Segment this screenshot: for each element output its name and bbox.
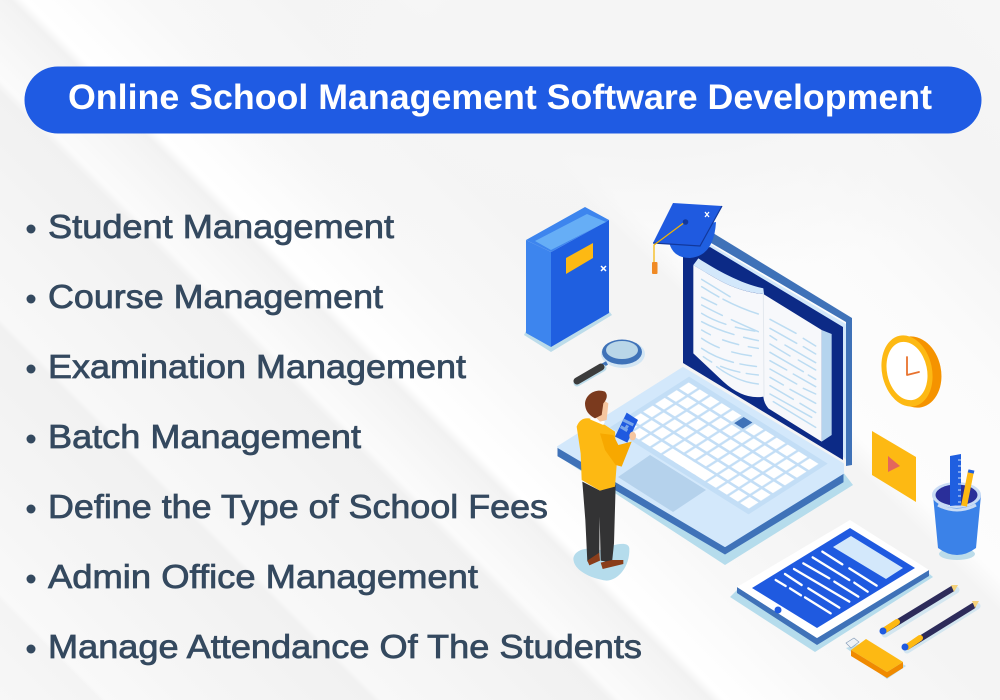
head xyxy=(593,397,608,422)
laptop screen lid xyxy=(683,233,852,466)
icon: graduation cap xyxy=(652,203,722,274)
book text lines xyxy=(702,279,816,427)
icon: pen 2 xyxy=(902,601,979,650)
laptop xyxy=(558,233,853,565)
feature list xyxy=(26,208,642,665)
title banner xyxy=(24,66,982,134)
person with tablet xyxy=(573,391,638,581)
list item: admin office: Admin Office Management xyxy=(48,558,478,595)
yellow pencil xyxy=(964,471,971,506)
icon: usb drive xyxy=(846,638,906,679)
list item: school fees: Define the Type of School Fees xyxy=(48,488,548,525)
list item: examination management: Examination Management xyxy=(48,348,466,385)
trousers xyxy=(582,482,616,563)
keyboard xyxy=(610,377,828,514)
floor shadow xyxy=(573,544,629,581)
icon: magnifying glass xyxy=(577,340,645,383)
list item: attendance: Manage Attendance Of The Students xyxy=(48,628,642,665)
ruler xyxy=(950,454,961,506)
document lines xyxy=(776,552,877,613)
open book on screen xyxy=(693,258,832,442)
list item: student management: Student Management xyxy=(48,208,394,245)
list item: batch management: Batch Management xyxy=(48,418,361,455)
title banner: Online School Management Software Development xyxy=(68,78,932,117)
hand tablet xyxy=(615,413,638,443)
icon: wall clock xyxy=(875,331,948,413)
icon: video play card xyxy=(872,431,916,502)
icon: blue book xyxy=(524,207,612,352)
shoes xyxy=(587,553,623,569)
list item: course management: Course Management xyxy=(48,278,383,315)
laptop base xyxy=(558,368,853,565)
tablet with document xyxy=(730,520,933,652)
sweater xyxy=(577,418,617,491)
trackpad xyxy=(618,455,706,512)
icon: pen 1 xyxy=(880,585,958,634)
icon: pen cup xyxy=(932,454,981,560)
